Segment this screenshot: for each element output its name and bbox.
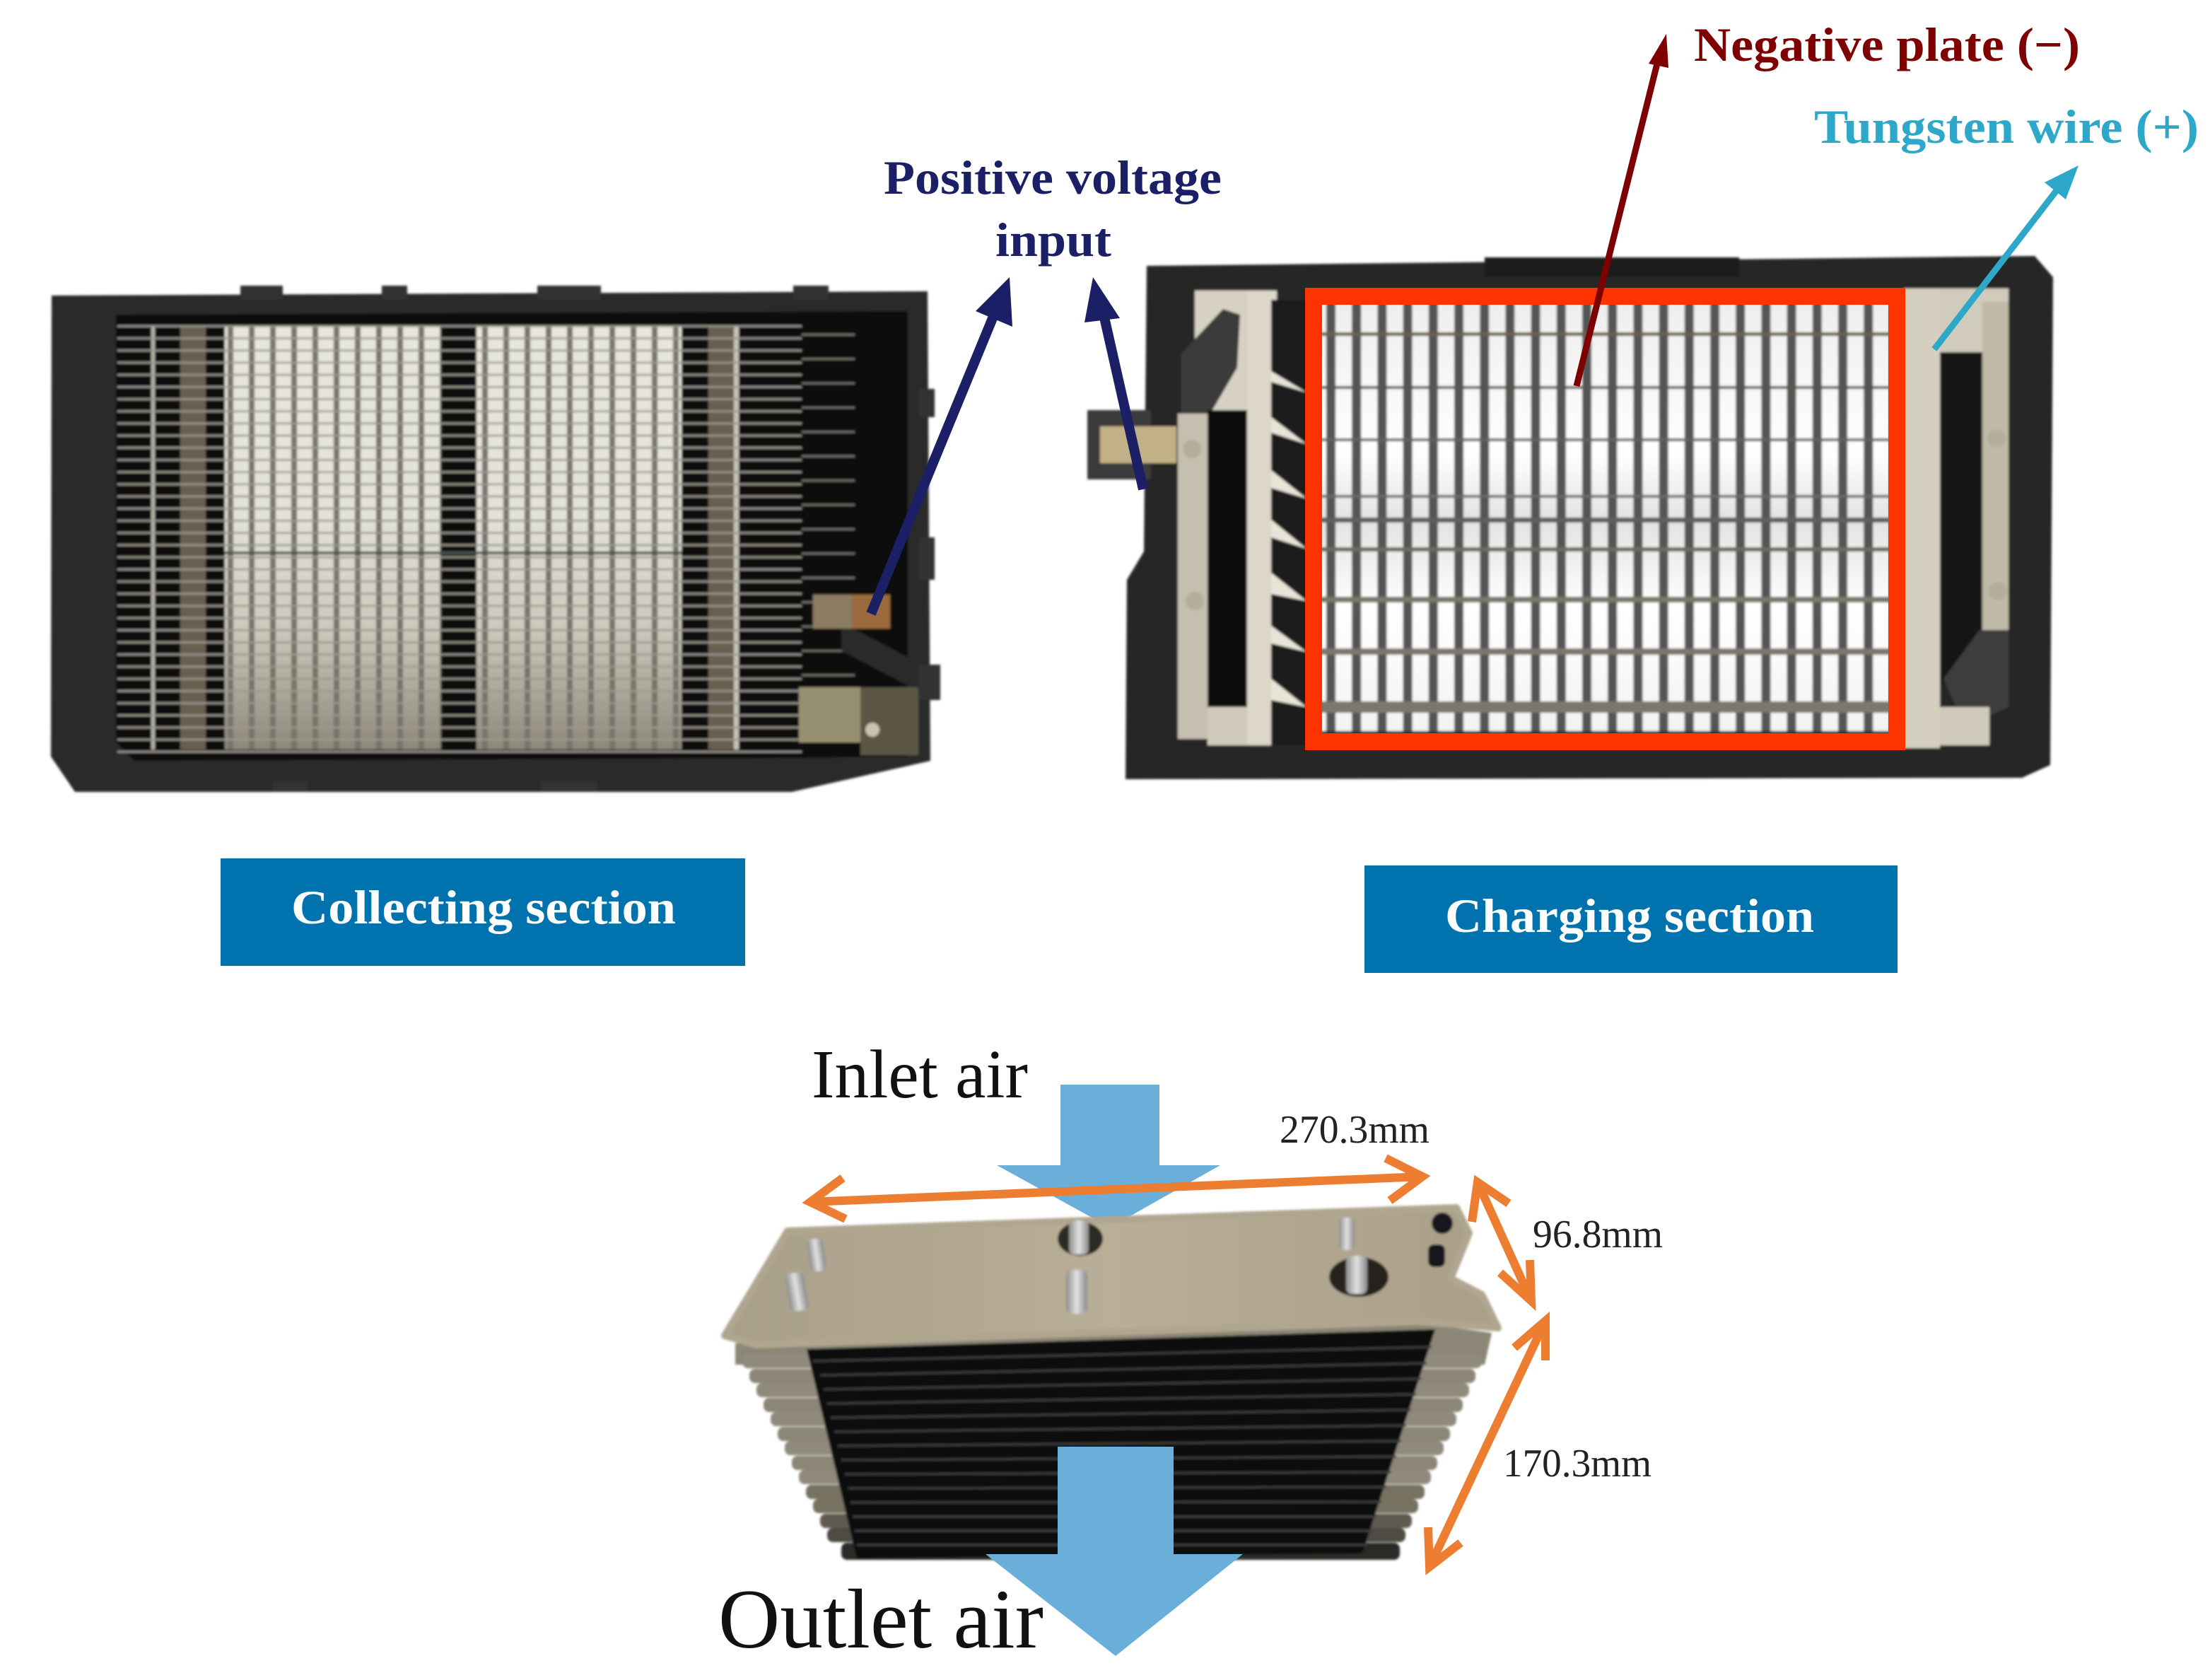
arrow: inlet air flow [997, 1085, 1220, 1227]
photo: collecting section housing [51, 286, 940, 792]
label: outlet air: Outlet air [718, 1572, 1043, 1666]
arrow: tungsten wire [1934, 165, 2079, 349]
button label: charging section [1364, 865, 1898, 973]
label: tungsten wire: Tungsten wire (+) [1814, 100, 2199, 153]
arrow: positive voltage to collecting section [871, 277, 1012, 614]
dimension: height 170.3mm: 170.3mm [1503, 1442, 1651, 1486]
arrow: positive voltage to charging section [1084, 277, 1143, 489]
label: inlet air: Inlet air [812, 1037, 1028, 1113]
dimension: width 270.3mm: 270.3mm [1280, 1108, 1430, 1152]
label: positive voltage input: Positive voltage [884, 151, 1222, 204]
red highlight box: charging area [1314, 296, 1897, 742]
dimension: width 270.3mm [810, 1108, 1430, 1219]
label: positive voltage input [884, 151, 1222, 267]
button label: collecting section [221, 858, 745, 966]
label: negative plate: Negative plate (−) [1694, 18, 2080, 71]
photo: electrostatic plate stack [725, 1208, 1498, 1560]
photo: charging section housing [1087, 256, 2053, 779]
dimension: height 170.3mm [1428, 1321, 1651, 1567]
button label: charging section: Charging section [1445, 889, 1814, 943]
dimension: depth 96.8mm [1472, 1182, 1663, 1301]
arrow: negative plate [1577, 34, 1668, 386]
dimension: depth 96.8mm: 96.8mm [1533, 1213, 1663, 1256]
label: positive voltage input: input [995, 213, 1111, 267]
button label: collecting section: Collecting section [291, 880, 676, 934]
arrow: outlet air flow [986, 1447, 1243, 1656]
